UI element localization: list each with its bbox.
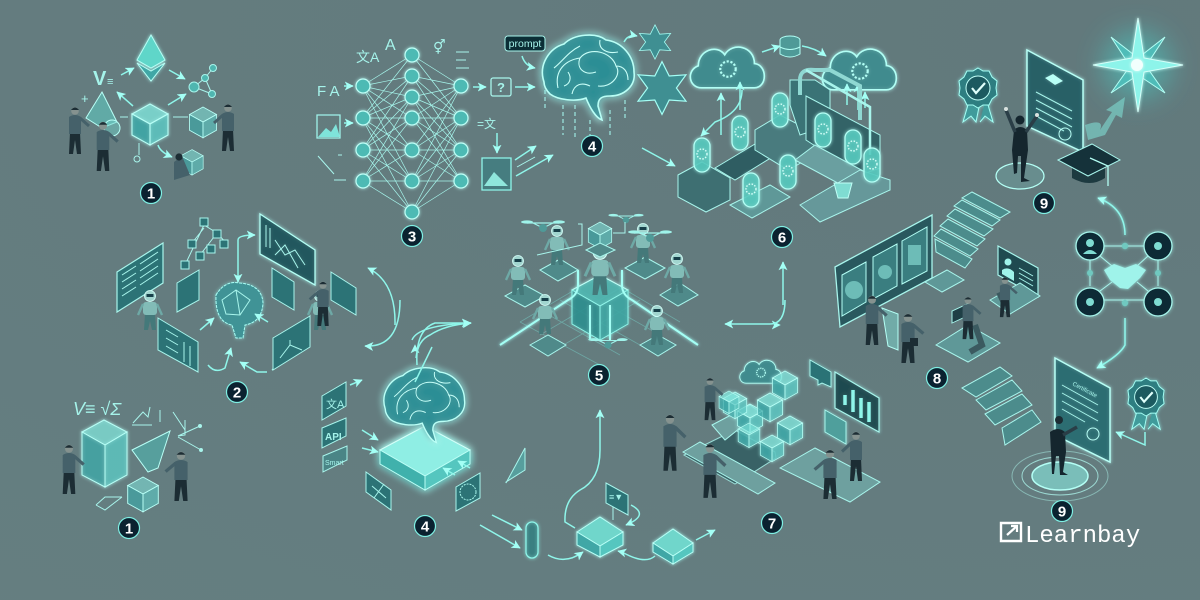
icon: central cube bbox=[132, 104, 168, 145]
arrows around central cube bbox=[117, 68, 188, 162]
mini charts bbox=[132, 407, 202, 452]
screen left bbox=[117, 243, 163, 312]
sign: ≡▼ bbox=[609, 492, 623, 502]
scene: platform 1 bottom bbox=[63, 399, 203, 512]
scene: platform 1 top, math objects and people: + bbox=[81, 91, 89, 106]
badge 5 bbox=[588, 364, 610, 386]
icon tiles: 文A bbox=[326, 397, 345, 411]
floor grid bbox=[520, 275, 680, 365]
equation text: V bbox=[93, 68, 107, 90]
badge 4 top: 4 bbox=[588, 138, 597, 156]
screens bbox=[810, 360, 879, 444]
drones bbox=[521, 214, 672, 349]
wires: platform 7 to lower 9 bbox=[828, 505, 1020, 569]
central stack bbox=[500, 270, 698, 345]
icon: crystal diamond bbox=[137, 35, 165, 81]
module cube bbox=[537, 222, 625, 257]
arrows bbox=[416, 262, 785, 560]
badge 6 bbox=[772, 226, 792, 248]
pill bbox=[526, 522, 538, 558]
arrows toward platform 4 bbox=[515, 146, 553, 176]
muffin-like part bbox=[834, 183, 852, 198]
person arms raised bbox=[1004, 107, 1039, 182]
stairs lower bbox=[962, 367, 1041, 445]
glowing star bbox=[1093, 18, 1183, 112]
certificate bbox=[1027, 50, 1083, 152]
people bbox=[69, 104, 234, 180]
network links bbox=[362, 55, 461, 212]
network nodes bbox=[356, 48, 468, 219]
badge 3 bbox=[402, 226, 422, 246]
people bbox=[63, 445, 188, 501]
badge 8: 8 bbox=[933, 370, 941, 388]
badge 6: 6 bbox=[778, 230, 786, 246]
chairs and monitors bbox=[952, 292, 1006, 352]
scene: platform 4 bottom bbox=[322, 323, 525, 511]
capsules bbox=[694, 93, 880, 207]
ring under person bbox=[996, 163, 1044, 189]
scene: platform 7 workspace bbox=[663, 360, 880, 502]
small screens bbox=[177, 268, 356, 315]
icon: pyramid bbox=[86, 92, 117, 128]
medal bbox=[959, 68, 997, 122]
desks bbox=[925, 270, 1040, 362]
podium bbox=[882, 308, 898, 350]
scene: platform 4 top, brain and prompt bbox=[505, 25, 686, 166]
icon: small cubes and sphere bbox=[104, 107, 216, 175]
badge 2: 2 bbox=[233, 384, 241, 402]
small module bbox=[653, 529, 693, 564]
cloud bbox=[740, 360, 781, 383]
robots bbox=[506, 224, 689, 345]
medal bbox=[1128, 378, 1164, 429]
stairs upper bbox=[934, 192, 1010, 268]
icon tiles: Smart bbox=[325, 460, 344, 467]
wall screens bbox=[835, 215, 932, 327]
input icons: F A bbox=[317, 83, 340, 100]
badge 9 top bbox=[1034, 192, 1054, 214]
rings bbox=[1012, 451, 1108, 501]
data streams bbox=[545, 90, 625, 150]
neural blob bbox=[216, 282, 263, 338]
network with handshake bbox=[1076, 198, 1172, 368]
icon: molecule bbox=[189, 64, 216, 98]
badge 4 bottom bbox=[414, 516, 436, 536]
scene: platform 5 robots bbox=[417, 214, 698, 365]
prompt tag: prompt bbox=[509, 38, 541, 50]
people bbox=[663, 378, 862, 499]
badge 3: 3 bbox=[408, 228, 416, 246]
wires: bundle between platform 7 and platform 5 bbox=[650, 345, 745, 425]
arrow bbox=[1116, 432, 1145, 445]
badge 4 bottom: 4 bbox=[421, 518, 430, 536]
input icons: =文 bbox=[477, 116, 496, 131]
scene: platform 1 top, math objects and people: ≡ bbox=[107, 76, 113, 88]
tree diagram bbox=[181, 218, 228, 269]
badge 1 top: 1 bbox=[147, 186, 155, 202]
sign bbox=[606, 483, 628, 520]
arrows bbox=[701, 46, 865, 136]
panel lower left bbox=[158, 318, 198, 372]
people bbox=[866, 277, 1017, 363]
prism bbox=[132, 431, 170, 472]
certificate bbox=[1055, 358, 1110, 462]
machines and conveyor bbox=[678, 70, 890, 222]
wires: circuit traces from platform 1 down to lower platform 1 bbox=[24, 182, 110, 463]
graduation cap bbox=[1058, 144, 1120, 186]
glowing chip bbox=[380, 426, 470, 490]
certificate: Certificate bbox=[1071, 381, 1098, 400]
scene: platform 1 top, math objects and people bbox=[69, 35, 234, 180]
scene: mid-bottom chain bbox=[416, 262, 785, 564]
badge 7: 7 bbox=[768, 516, 776, 532]
brain bbox=[384, 368, 465, 442]
scene: platform 9 bottom, certificate holder bbox=[1012, 358, 1164, 501]
cubes bbox=[719, 371, 803, 462]
icon tiles: API bbox=[325, 432, 342, 443]
brain bbox=[542, 35, 634, 120]
stars bbox=[624, 25, 686, 114]
wires: bundle between platform 6 and platform 5 bbox=[640, 210, 740, 316]
chart panel bbox=[260, 214, 315, 285]
question box and arrows bbox=[473, 78, 535, 96]
small arrows bbox=[350, 323, 471, 475]
input icons: 文A bbox=[356, 49, 380, 65]
wires: bundle between lower 4 and platform 5 bbox=[462, 345, 575, 442]
database bbox=[780, 36, 800, 57]
badge 8 bbox=[926, 368, 948, 388]
badge 4 top bbox=[582, 136, 602, 156]
connector bbox=[96, 497, 122, 510]
scene: neural network on platform 3 bbox=[317, 37, 553, 219]
tables bbox=[683, 405, 880, 502]
Learnbay logo: Learnbay bbox=[1025, 523, 1140, 550]
profile screen bbox=[998, 246, 1038, 297]
pads bbox=[505, 257, 698, 356]
person bbox=[1050, 416, 1077, 475]
small cube bbox=[128, 477, 158, 512]
input icons bbox=[317, 37, 496, 180]
panel lower right bbox=[272, 316, 310, 370]
badge 1 top bbox=[140, 182, 162, 204]
badge 1 bottom: 1 bbox=[125, 520, 133, 538]
badge 9 top: 9 bbox=[1040, 196, 1048, 212]
prompt tag bbox=[505, 36, 545, 68]
badge 7 bbox=[762, 512, 782, 534]
image tool card bbox=[482, 133, 511, 190]
arrows bbox=[200, 235, 400, 372]
input icons: ⚥ bbox=[433, 39, 446, 55]
scene: platform 6 pipeline bbox=[678, 36, 896, 222]
equation text: V≡ √Σ bbox=[73, 399, 122, 419]
badge 1 bottom bbox=[118, 518, 140, 538]
people bbox=[138, 282, 332, 330]
icon tiles bbox=[322, 382, 525, 511]
scene: platform 9 top, graduate and star bbox=[934, 18, 1183, 268]
badge 5: 5 bbox=[595, 368, 603, 384]
question box and arrows: ? bbox=[497, 80, 505, 95]
large glass cube bbox=[82, 420, 127, 487]
scene: platform 8 office bbox=[835, 215, 1040, 363]
wires: lower 1 to lower 4 bbox=[178, 507, 365, 571]
chip stack bbox=[577, 517, 623, 557]
input icons: A bbox=[385, 37, 396, 54]
number badges bbox=[118, 136, 1072, 538]
arrow to star bbox=[1085, 97, 1125, 140]
wires: bundle between platform 3 and platform 5 bbox=[450, 215, 556, 310]
badge 9 bottom bbox=[1052, 500, 1072, 522]
arrow link bbox=[417, 323, 470, 365]
clouds bbox=[690, 47, 896, 90]
badge 2 bbox=[226, 382, 248, 402]
scene: platform 2 bbox=[117, 214, 400, 372]
arrow to platform 6 bbox=[642, 148, 675, 166]
badge 9 bottom: 9 bbox=[1058, 504, 1066, 520]
